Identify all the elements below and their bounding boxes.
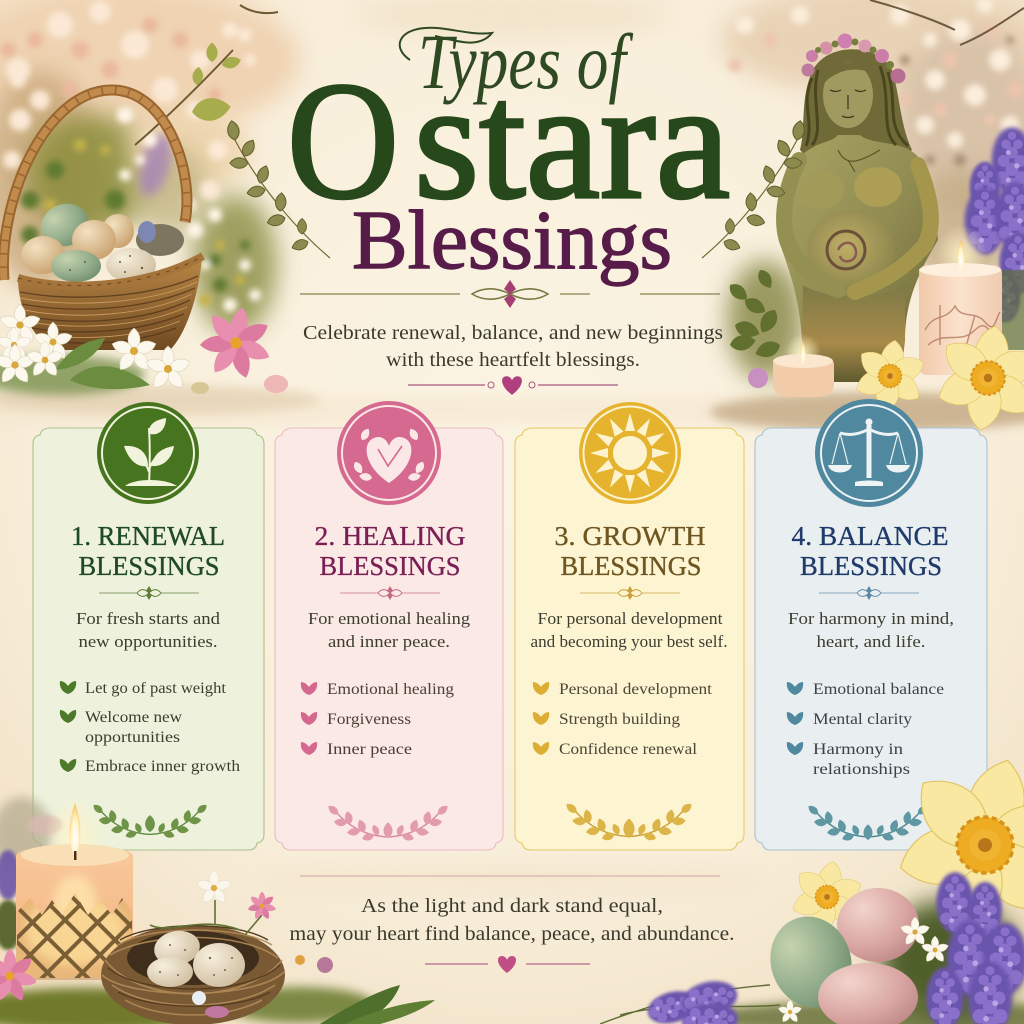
heading xyxy=(71,521,225,581)
heading: 2. HEALING xyxy=(314,521,466,551)
closing divider xyxy=(300,875,720,877)
description: heart, and life. xyxy=(816,632,926,651)
scene: goddess statue xyxy=(781,34,938,382)
bullet list xyxy=(60,680,240,775)
bullet list xyxy=(533,681,713,758)
bullet list xyxy=(787,681,944,778)
description: For personal development xyxy=(538,609,723,628)
description: For emotional healing xyxy=(308,609,471,628)
description: For fresh starts and xyxy=(76,609,221,628)
panel: healing blessings xyxy=(275,401,503,850)
bullet list: Harmony in xyxy=(813,741,903,758)
icon: sun xyxy=(579,402,681,504)
heading: BLESSINGS xyxy=(78,551,220,581)
wreath xyxy=(326,803,450,842)
icon: heart xyxy=(337,401,441,505)
title: Ostara: O xyxy=(287,48,399,234)
description xyxy=(788,609,954,651)
bullet list: Let go of past weight xyxy=(85,680,227,697)
bullet list: Confidence renewal xyxy=(559,741,697,758)
title: Ostara: stara xyxy=(414,48,730,234)
description: new opportunities. xyxy=(78,632,218,651)
heading xyxy=(792,521,948,581)
wreath xyxy=(806,803,930,842)
subtitle heart divider xyxy=(408,376,618,395)
description: and inner peace. xyxy=(328,632,450,651)
bullet list: Mental clarity xyxy=(813,711,912,728)
wreath xyxy=(91,802,209,839)
subtitle: Celebrate renewal, balance, and new beginnings xyxy=(303,322,723,344)
bullet list: Embrace inner growth xyxy=(85,758,240,775)
bullet list: Personal development xyxy=(559,681,713,698)
heading: 3. GROWTH xyxy=(554,521,706,551)
vine: left laurel xyxy=(226,120,330,258)
heading: BLESSINGS xyxy=(560,551,702,581)
subtitle: with these heartfelt blessings. xyxy=(386,349,640,371)
heading xyxy=(554,521,706,581)
closing message: may your heart find balance, peace, and abundance. xyxy=(290,924,734,945)
description xyxy=(76,609,221,651)
icon: sprout xyxy=(97,402,199,504)
heading: 4. BALANCE xyxy=(792,521,948,551)
heading: 1. RENEWAL xyxy=(71,521,225,551)
bullet list: Forgiveness xyxy=(327,711,411,728)
scene: top-left blossoms and foliage xyxy=(0,0,300,335)
wreath xyxy=(564,801,694,842)
closing message xyxy=(290,896,734,945)
icon: scales xyxy=(815,399,923,507)
title: Blessings: Blessings xyxy=(352,194,672,287)
panel: growth blessings xyxy=(515,402,744,850)
panel: renewal blessings xyxy=(33,402,264,850)
scene: bottom-left candle and nest xyxy=(0,795,435,1024)
vine: right laurel xyxy=(702,120,806,258)
description xyxy=(530,609,728,651)
subtitle xyxy=(303,322,723,371)
title xyxy=(287,18,730,287)
scene: top-right blossoms and lavender xyxy=(720,0,1024,380)
bullet list: Strength building xyxy=(559,711,680,728)
bullet list: Emotional healing xyxy=(327,681,454,698)
bullet list: Inner peace xyxy=(327,741,412,758)
scene: bottom-right eggs, daffodils and lavender xyxy=(600,737,1024,1024)
description: and becoming your best self. xyxy=(530,632,728,651)
description xyxy=(308,609,471,651)
heading: BLESSINGS xyxy=(800,551,942,581)
closing message: As the light and dark stand equal, xyxy=(361,896,663,917)
scene: candles and daffodils at right xyxy=(773,225,1024,437)
title ornament xyxy=(300,280,720,308)
bullet list: Emotional balance xyxy=(813,681,944,698)
bullet list: opportunities xyxy=(85,729,180,746)
bullet list: relationships xyxy=(813,761,910,778)
title: Types of: Types of xyxy=(418,18,634,105)
heading xyxy=(314,521,466,581)
description: For harmony in mind, xyxy=(788,609,954,628)
heading: BLESSINGS xyxy=(320,551,460,581)
scene: bush beside statue xyxy=(726,267,783,388)
panel: balance blessings xyxy=(755,399,987,850)
bullet list xyxy=(301,681,454,758)
closing heart divider xyxy=(425,956,590,973)
scene: Easter egg basket xyxy=(3,90,203,350)
scene: white flowers and pink bloom xyxy=(0,301,288,395)
bullet list: Welcome new xyxy=(85,709,183,726)
